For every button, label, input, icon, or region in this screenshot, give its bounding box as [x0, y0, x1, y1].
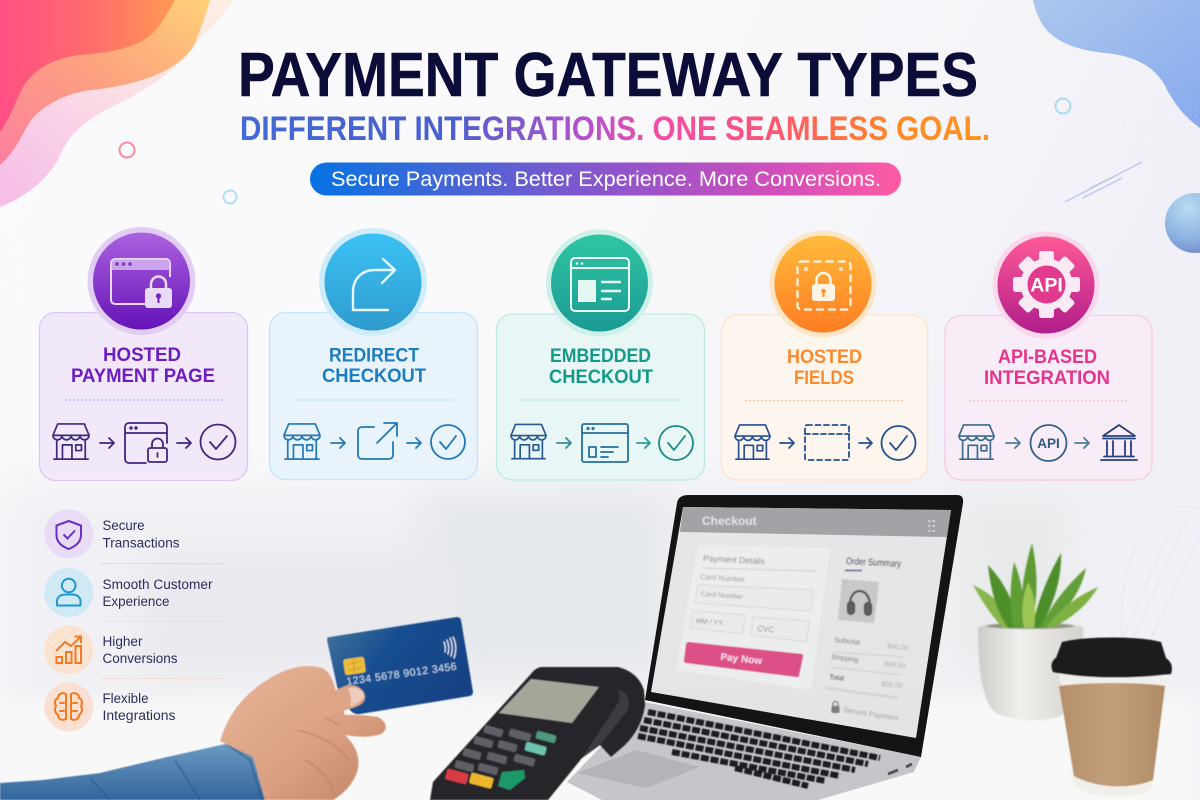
subtitle: DIFFERENT INTEGRATIONS. ONE SEAMLESS GOAL. [240, 110, 990, 148]
flow: store to embedded form to success [511, 424, 693, 462]
order summary: $00.00 [887, 643, 909, 652]
benefit: secure transactions [44, 510, 180, 558]
icon: API gear badge: API [1030, 274, 1063, 296]
decorative diagonal lines [1065, 162, 1142, 202]
decorative blob: top right [1033, 0, 1200, 128]
order summary: Subtotal [834, 637, 861, 647]
title: PAYMENT GATEWAY TYPES [238, 41, 978, 110]
icon: API gear badge [992, 232, 1100, 338]
order summary: Shipping [831, 654, 859, 664]
decorative rings [120, 98, 1070, 204]
benefit: secure transactions: Secure [102, 518, 144, 533]
benefit: flexible integrations [44, 682, 176, 732]
panel: embedded checkout [496, 230, 704, 480]
screen bezel [645, 495, 963, 757]
payment form: Payment Details [703, 553, 765, 566]
benefit: flexible integrations: Integrations [102, 708, 176, 723]
payment form: CVC [757, 624, 775, 634]
payment form [676, 545, 830, 690]
heading: API-BASED [998, 346, 1097, 368]
blurred photo backdrop [0, 480, 1200, 800]
panel: redirect checkout [270, 228, 478, 480]
heading [322, 344, 426, 387]
tagline pill [310, 162, 901, 196]
heading [549, 345, 653, 388]
benefit: higher conversions: Conversions [102, 651, 178, 666]
payment form: Pay Now [720, 652, 763, 667]
headphones [848, 591, 871, 615]
flow: store to API to bank [959, 425, 1137, 461]
hand back and fingers [220, 666, 386, 800]
payment form: Card Number [700, 572, 746, 584]
flow: store to API to bank: API [1037, 436, 1060, 451]
photo: laptop [567, 495, 963, 800]
heading [787, 346, 862, 389]
credit card: 1234 5678 9012 3456 [346, 661, 457, 688]
order summary: $00.00 [884, 661, 906, 670]
icon: redirect badge [319, 228, 427, 336]
benefit: smooth customer experience: Smooth Customer [102, 577, 213, 592]
terminal body and printer [430, 667, 645, 800]
icon: embedded badge [546, 230, 653, 336]
benefit: secure transactions: Transactions [102, 536, 180, 550]
payment form: MM / YY [696, 618, 723, 627]
order summary: $00.00 [881, 681, 903, 690]
flow: store to hosted fields to success [735, 425, 916, 460]
POS keypad [445, 725, 557, 790]
heading [984, 346, 1110, 389]
heading: REDIRECT [329, 344, 419, 366]
decorative blob: top left [0, 0, 233, 207]
laptop base [567, 702, 921, 800]
heading: PAYMENT PAGE [71, 365, 215, 387]
payment form: Card Number [701, 591, 744, 601]
panel: hosted fields [722, 230, 928, 480]
order summary: Order Summary [846, 556, 902, 570]
heading: INTEGRATION [984, 367, 1110, 389]
photo: hand holding card [0, 617, 473, 800]
decorative sphere [1165, 193, 1200, 253]
icon: hosted payment badge [88, 227, 196, 335]
panel: api-based integration [945, 232, 1152, 480]
photo: plant [973, 543, 1098, 720]
POS screen [499, 679, 599, 723]
keyboard [638, 712, 880, 786]
order summary: Total [829, 674, 845, 683]
benefit: smooth customer experience: Experience [102, 594, 170, 609]
heading: HOSTED [787, 346, 862, 368]
finger creases [298, 717, 348, 792]
heading: EMBEDDED [550, 345, 651, 367]
order summary [826, 556, 909, 723]
heading: HOSTED [103, 344, 181, 366]
laptop screen: Checkout [702, 514, 757, 528]
photo: POS card terminal [430, 667, 645, 800]
order summary: Secure Payment [843, 705, 900, 723]
heading: FIELDS [794, 367, 854, 389]
decorative line art [1121, 506, 1200, 640]
laptop screen [651, 507, 951, 738]
flow: store to redirect to success [284, 423, 465, 459]
decorative dot texture [0, 80, 1200, 310]
benefit: higher conversions [44, 626, 178, 674]
denim sleeve [0, 743, 265, 800]
panel: hosted payment page [40, 227, 248, 480]
benefit: higher conversions: Higher [102, 634, 143, 649]
heading: CHECKOUT [322, 365, 426, 387]
thumb [296, 685, 365, 727]
credit card [327, 617, 473, 714]
heading: CHECKOUT [549, 366, 653, 388]
benefits list [44, 510, 224, 732]
icon: hosted fields badge [770, 230, 876, 338]
flow: store to payment page to success [53, 423, 236, 463]
tagline pill: Secure Payments. Better Experience. More Conversions. [331, 167, 881, 191]
benefit: flexible integrations: Flexible [102, 691, 148, 706]
benefit: smooth customer experience [44, 568, 213, 617]
heading [71, 344, 215, 387]
photo: coffee cup [1052, 638, 1172, 797]
